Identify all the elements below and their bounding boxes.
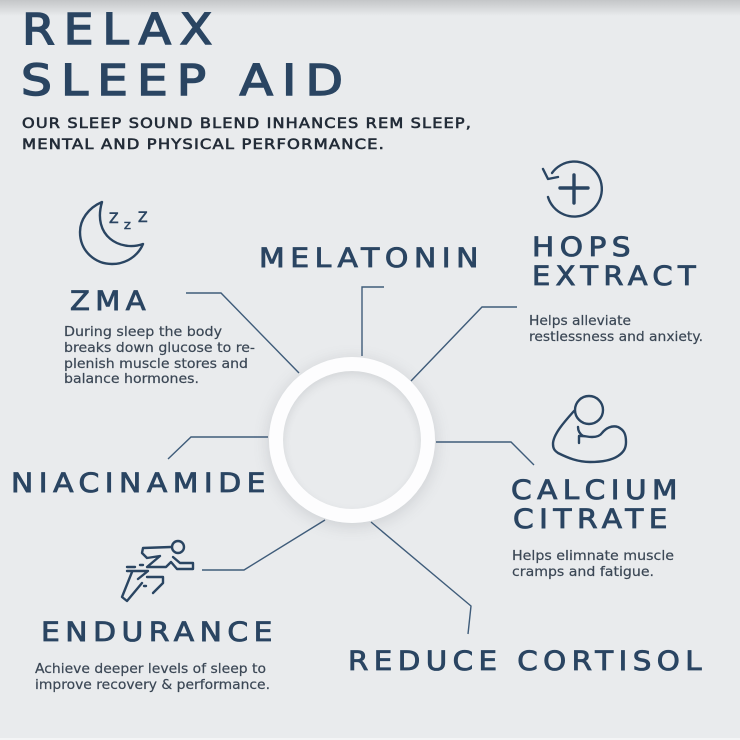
Melatonin heading: MELATONIN [259, 243, 484, 274]
icon: running figure [122, 541, 193, 601]
Niacinamide heading: NIACINAMIDE [11, 468, 271, 499]
Hops extract heading [532, 232, 701, 292]
icon: moon with zzz [80, 202, 148, 264]
icon: moon with zzz: Z [109, 211, 119, 227]
ZMA description [64, 325, 255, 387]
title [21, 5, 352, 106]
title: SLEEP AID [21, 56, 352, 106]
icon: moon with zzz: Z [124, 221, 131, 232]
icon: moon with zzz: Z [138, 210, 148, 226]
Hops description [529, 314, 703, 345]
subtitle: MENTAL AND PHYSICAL PERFORMANCE. [22, 137, 385, 153]
subtitle: OUR SLEEP SOUND BLEND INHANCES REM SLEEP, [22, 116, 472, 132]
icon: circular arrow with plus [543, 162, 602, 217]
Calcium citrate heading: CALCIUM [511, 475, 683, 506]
ZMA description: plenish muscle stores and [64, 357, 248, 372]
ZMA description: During sleep the body [64, 325, 222, 340]
Hops description: restlessness and anxiety. [529, 330, 703, 345]
Calcium citrate description: Helps elimnate muscle [512, 549, 674, 564]
Endurance description: Achieve deeper levels of sleep to [35, 662, 266, 677]
icon: flexed muscle arm [553, 396, 626, 462]
ZMA heading: ZMA [70, 286, 151, 317]
Endurance description: improve recovery & performance. [35, 678, 270, 693]
title: RELAX [22, 5, 221, 55]
top shadow band [0, 0, 740, 16]
Reduce cortisol heading: REDUCE CORTISOL [348, 646, 707, 677]
bottom light edge [0, 738, 740, 740]
Hops extract heading: HOPS [532, 232, 636, 263]
Hops extract heading: EXTRACT [532, 261, 701, 292]
Hops description: Helps alleviate [529, 314, 631, 329]
ZMA description: balance hormones. [64, 372, 199, 387]
ZMA description: breaks down glucose to re- [64, 341, 255, 356]
Calcium citrate heading [511, 475, 683, 535]
Calcium citrate heading: CITRATE [513, 504, 673, 535]
Calcium citrate description [512, 549, 674, 580]
Calcium citrate description: cramps and fatigue. [512, 565, 654, 580]
center white ring [269, 357, 435, 523]
connector lines [168, 287, 534, 634]
subtitle [22, 116, 472, 153]
Endurance heading: ENDURANCE [41, 617, 278, 648]
Endurance description [35, 662, 270, 693]
